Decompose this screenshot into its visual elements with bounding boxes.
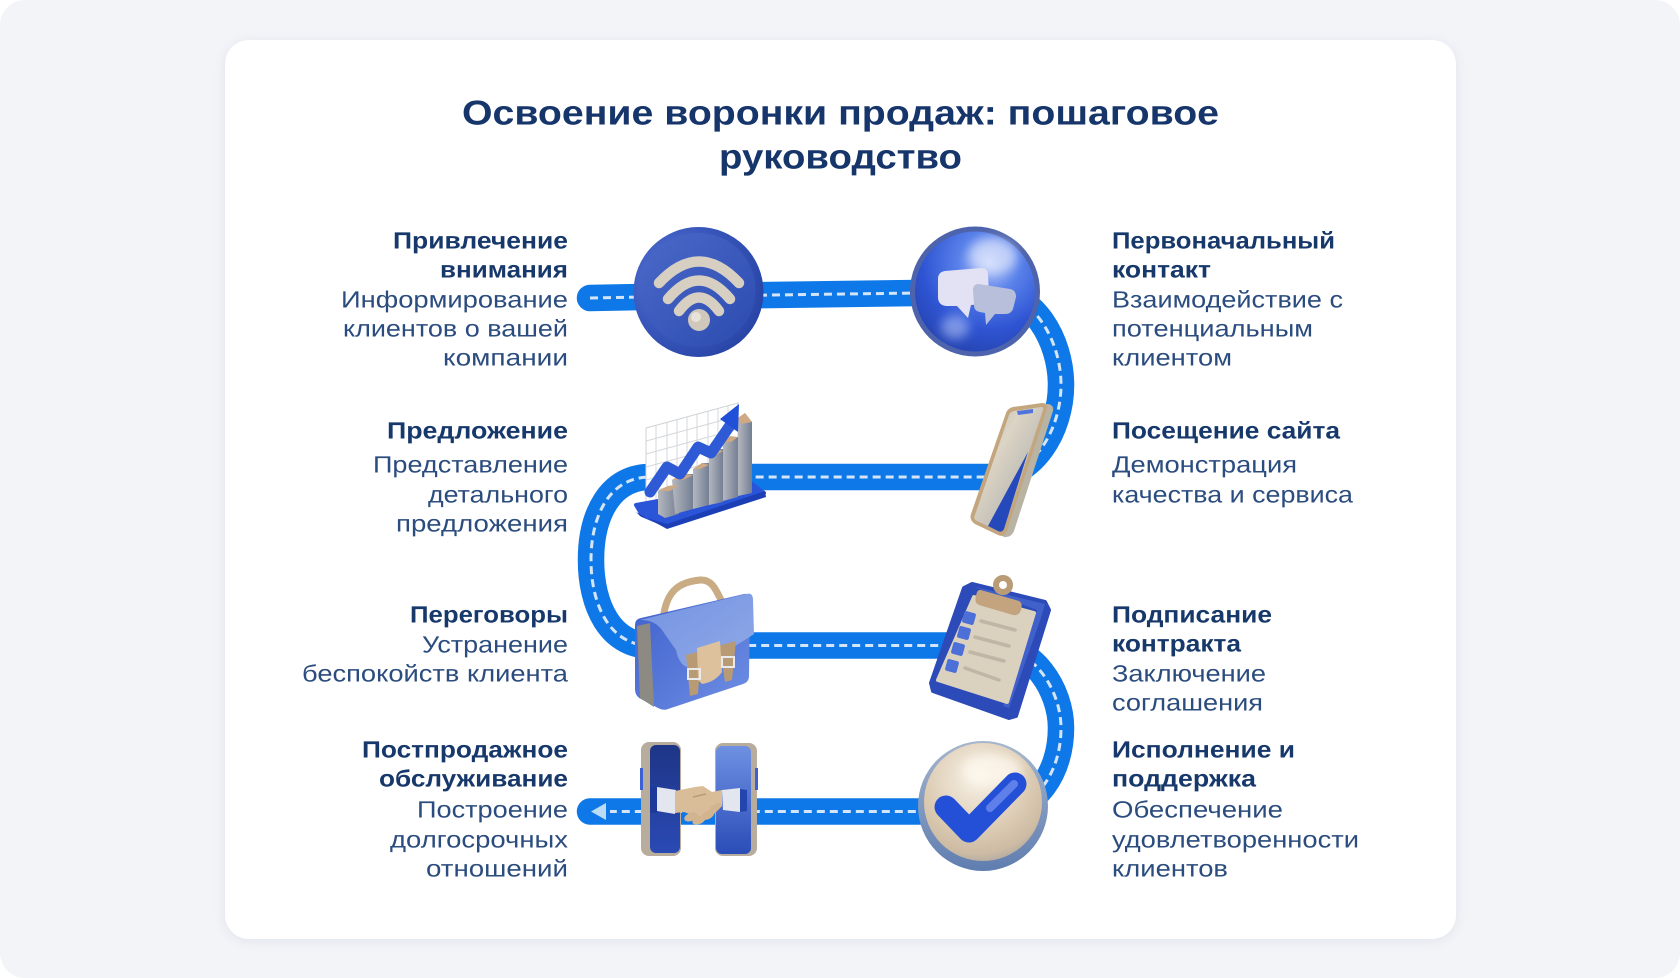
text: Посещение сайта: Демонстрация [1112,451,1297,477]
text: Предложение: детального [428,481,568,507]
icon: check mark sphere [918,741,1048,871]
text: Первоначальный контакт: потенциальным [1112,315,1313,341]
text: Посещение сайта: качества и сервиса [1112,481,1354,507]
text: Постпродажное обслуживание: долгосрочных [390,826,568,852]
text: Переговоры: Переговоры [410,601,568,627]
icon: briefcase [635,580,754,710]
icon: smartphone [970,403,1053,537]
text: Предложение [373,417,568,536]
text: Предложение: предложения [396,510,568,536]
text: Первоначальный контакт: Взаимодействие с [1112,286,1343,312]
text: Переговоры [302,601,569,686]
text: Посещение сайта [1112,417,1354,507]
text: Подписание контракта: Заключение [1112,660,1266,686]
text: Постпродажное обслуживание: обслуживание [379,765,568,791]
title: Освоение воронки продаж: пошаговое [462,94,1219,132]
card panel [225,40,1456,939]
text: Подписание контракта [1112,601,1272,715]
text: Подписание контракта: контракта [1112,630,1242,656]
text: Переговоры: беспокойств клиента [302,660,569,686]
title: руководство [719,138,962,176]
text: Постпродажное обслуживание [362,736,568,881]
text: Посещение сайта: Посещение сайта [1112,417,1341,443]
text: Исполнение и поддержка: Исполнение и [1112,736,1295,762]
text: Привлечение внимания: внимания [440,256,568,282]
text: Постпродажное обслуживание: отношений [426,855,568,881]
road: winding path [590,292,1061,812]
text: Исполнение и поддержка: удовлетворенности [1112,826,1359,852]
text: Исполнение и поддержка: клиентов [1112,855,1228,881]
icon: chart [636,403,766,529]
text: Исполнение и поддержка: поддержка [1112,765,1257,791]
text: Первоначальный контакт: контакт [1112,256,1211,282]
icon: handshake phones [640,742,758,856]
text: Исполнение и поддержка: Обеспечение [1112,796,1283,822]
icon: wifi [634,227,764,357]
text: Привлечение внимания: компании [443,344,568,370]
arrowhead on road [591,803,606,820]
icon: chat bubbles [910,226,1040,356]
text: Подписание контракта: соглашения [1112,689,1263,715]
text: Первоначальный контакт: клиентом [1112,344,1232,370]
text: Привлечение внимания [341,227,568,370]
text: Привлечение внимания: Информирование [341,286,568,312]
text: Предложение: Предложение [387,417,568,443]
text: Привлечение внимания: клиентов о вашей [343,315,568,341]
text: Постпродажное обслуживание: Постпродажное [362,736,568,762]
icon: clipboard [931,578,1049,718]
title [462,94,1219,176]
text: Первоначальный контакт: Первоначальный [1112,227,1335,253]
text: Подписание контракта: Подписание [1112,601,1272,627]
text: Привлечение внимания: Привлечение [393,227,568,253]
text: Постпродажное обслуживание: Построение [417,796,568,822]
text: Первоначальный контакт [1112,227,1343,370]
text: Исполнение и поддержка [1112,736,1359,881]
text: Предложение: Представление [373,451,568,477]
text: Переговоры: Устранение [422,631,568,657]
